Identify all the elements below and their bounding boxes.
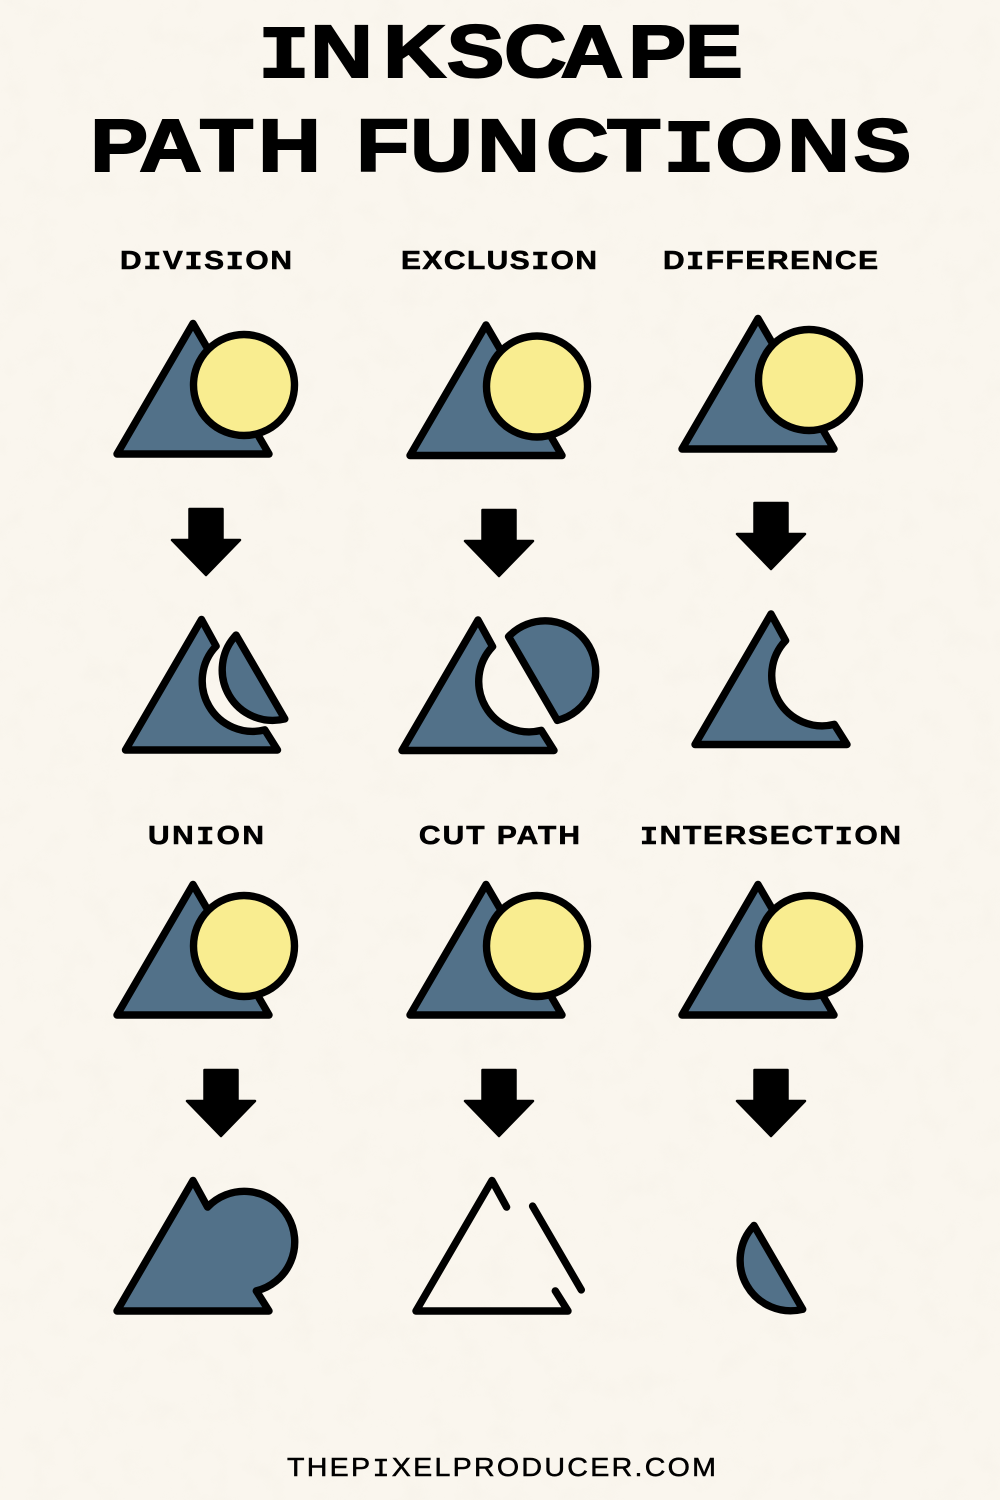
result: split triangle and crescent: [126, 620, 285, 750]
arrow: [737, 503, 805, 569]
panel: exclusion: [401, 246, 597, 750]
arrow: [187, 1070, 255, 1136]
heading: union: UNION: [148, 821, 264, 852]
input shapes: triangle and circle: [410, 884, 588, 1015]
heading: division: DIVISION: [120, 246, 292, 277]
input shapes: triangle and circle: [682, 318, 860, 449]
arrow: [737, 1070, 805, 1136]
input shapes: triangle and circle: [117, 324, 294, 454]
result: overlap crescent: [740, 1226, 803, 1311]
title: PATH: [90, 105, 321, 188]
title: ONS: [715, 105, 911, 188]
result: triangle with bite and circle remainder: [402, 620, 596, 750]
heading: exclusion: EXCLUSION: [401, 246, 597, 277]
footer url: THEPIXELPRODUCER.COM: [287, 1452, 716, 1485]
panel: cut path: [410, 821, 588, 1311]
title: [90, 11, 911, 194]
input shapes: triangle and circle: [117, 884, 294, 1015]
panel: difference: [663, 246, 878, 744]
input shapes: triangle and circle: [682, 884, 860, 1015]
heading: intersection: INTERSECTION: [640, 821, 901, 852]
panel: intersection: [640, 821, 901, 1311]
panel: division: [117, 246, 294, 750]
result: merged shape: [117, 1180, 295, 1311]
input shapes: triangle and circle: [410, 325, 588, 456]
title: I: [258, 16, 310, 100]
title: FUNCT: [356, 105, 660, 188]
arrow: [172, 509, 240, 575]
heading: cut path: CUT PATH: [419, 821, 580, 850]
result: open outline segments: [416, 1180, 581, 1311]
title: I: [663, 110, 715, 194]
arrow: [465, 1070, 533, 1136]
title: NKSCAPE: [310, 11, 743, 94]
heading: difference: DIFFERENCE: [663, 246, 878, 277]
arrow: [465, 510, 533, 576]
panel: union: [117, 821, 295, 1311]
result: triangle with bite: [695, 614, 847, 744]
